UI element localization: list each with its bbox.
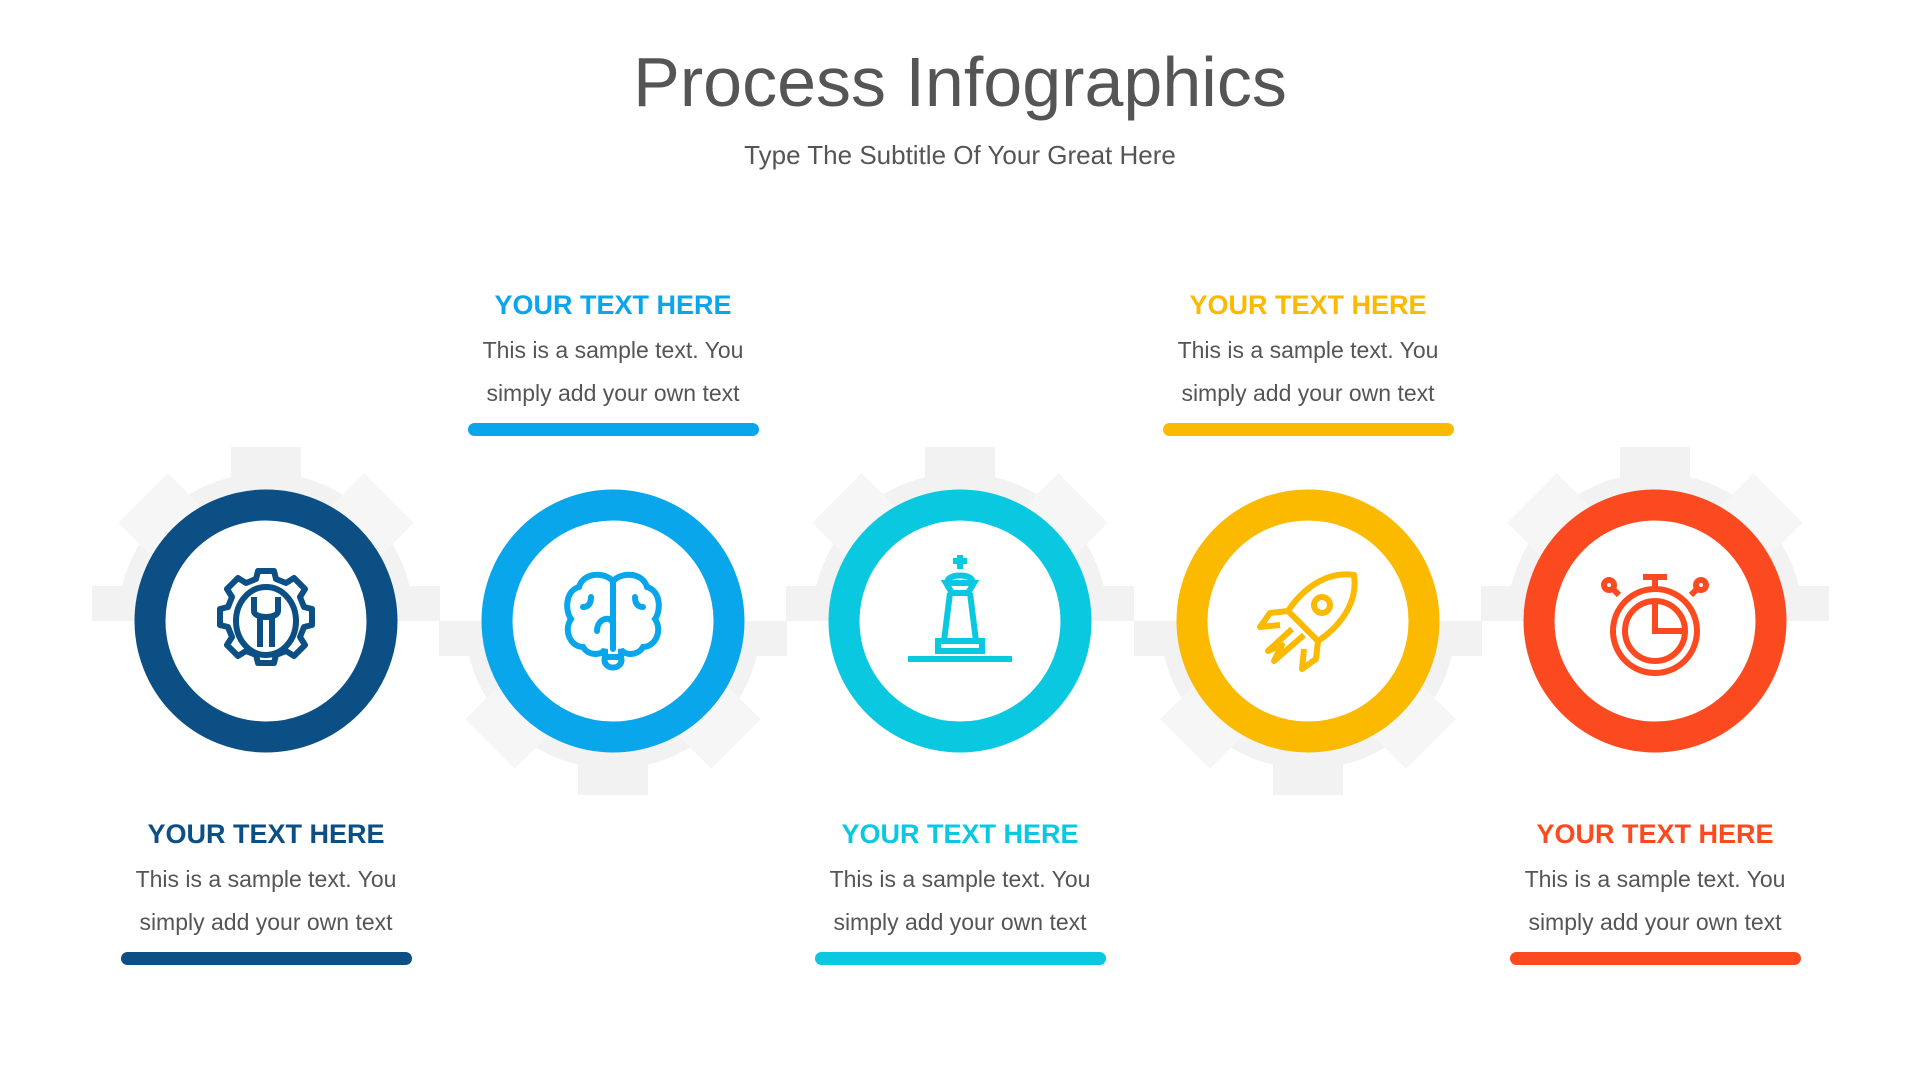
diagram: gears and circles <box>92 447 1829 795</box>
text: step 1 (bottom) <box>121 819 412 965</box>
text: step 5 (bottom): simply add your own text <box>1528 909 1782 935</box>
text: step 5 (bottom): YOUR TEXT HERE <box>1536 819 1774 849</box>
step 2: brain icon circle <box>439 490 787 795</box>
text: step 5 (bottom): This is a sample text. You <box>1525 866 1785 892</box>
subtitle: Type The Subtitle Of Your Great Here <box>744 140 1176 170</box>
step 3: chess king icon circle <box>786 447 1134 752</box>
step 1: gear icon circle <box>92 447 440 752</box>
text: step 1 (bottom): YOUR TEXT HERE <box>147 819 385 849</box>
text: step 2 (top): YOUR TEXT HERE <box>494 290 732 320</box>
text: step 3 (bottom): YOUR TEXT HERE <box>841 819 1079 849</box>
text: step 1 (bottom): simply add your own text <box>139 909 393 935</box>
text: step 4 (top): YOUR TEXT HERE <box>1189 290 1427 320</box>
text: step 3 (bottom): This is a sample text. You <box>830 866 1090 892</box>
text: step 4 (top): This is a sample text. You <box>1178 337 1438 363</box>
text: step 5 (bottom) <box>1510 819 1801 965</box>
text: step 4 (top) <box>1163 290 1454 436</box>
text: step 2 (top): simply add your own text <box>486 380 740 406</box>
text: step 1 (bottom): This is a sample text. You <box>136 866 396 892</box>
step 4: rocket icon circle <box>1134 490 1482 795</box>
text: step 2 (top) <box>468 290 759 436</box>
title: Process Infographics <box>633 43 1287 121</box>
text: step 4 (top): simply add your own text <box>1181 380 1435 406</box>
text: step 3 (bottom) <box>815 819 1106 965</box>
step 5: stopwatch icon circle <box>1481 447 1829 752</box>
text: step 2 (top): This is a sample text. You <box>483 337 743 363</box>
text: step 3 (bottom): simply add your own text <box>833 909 1087 935</box>
